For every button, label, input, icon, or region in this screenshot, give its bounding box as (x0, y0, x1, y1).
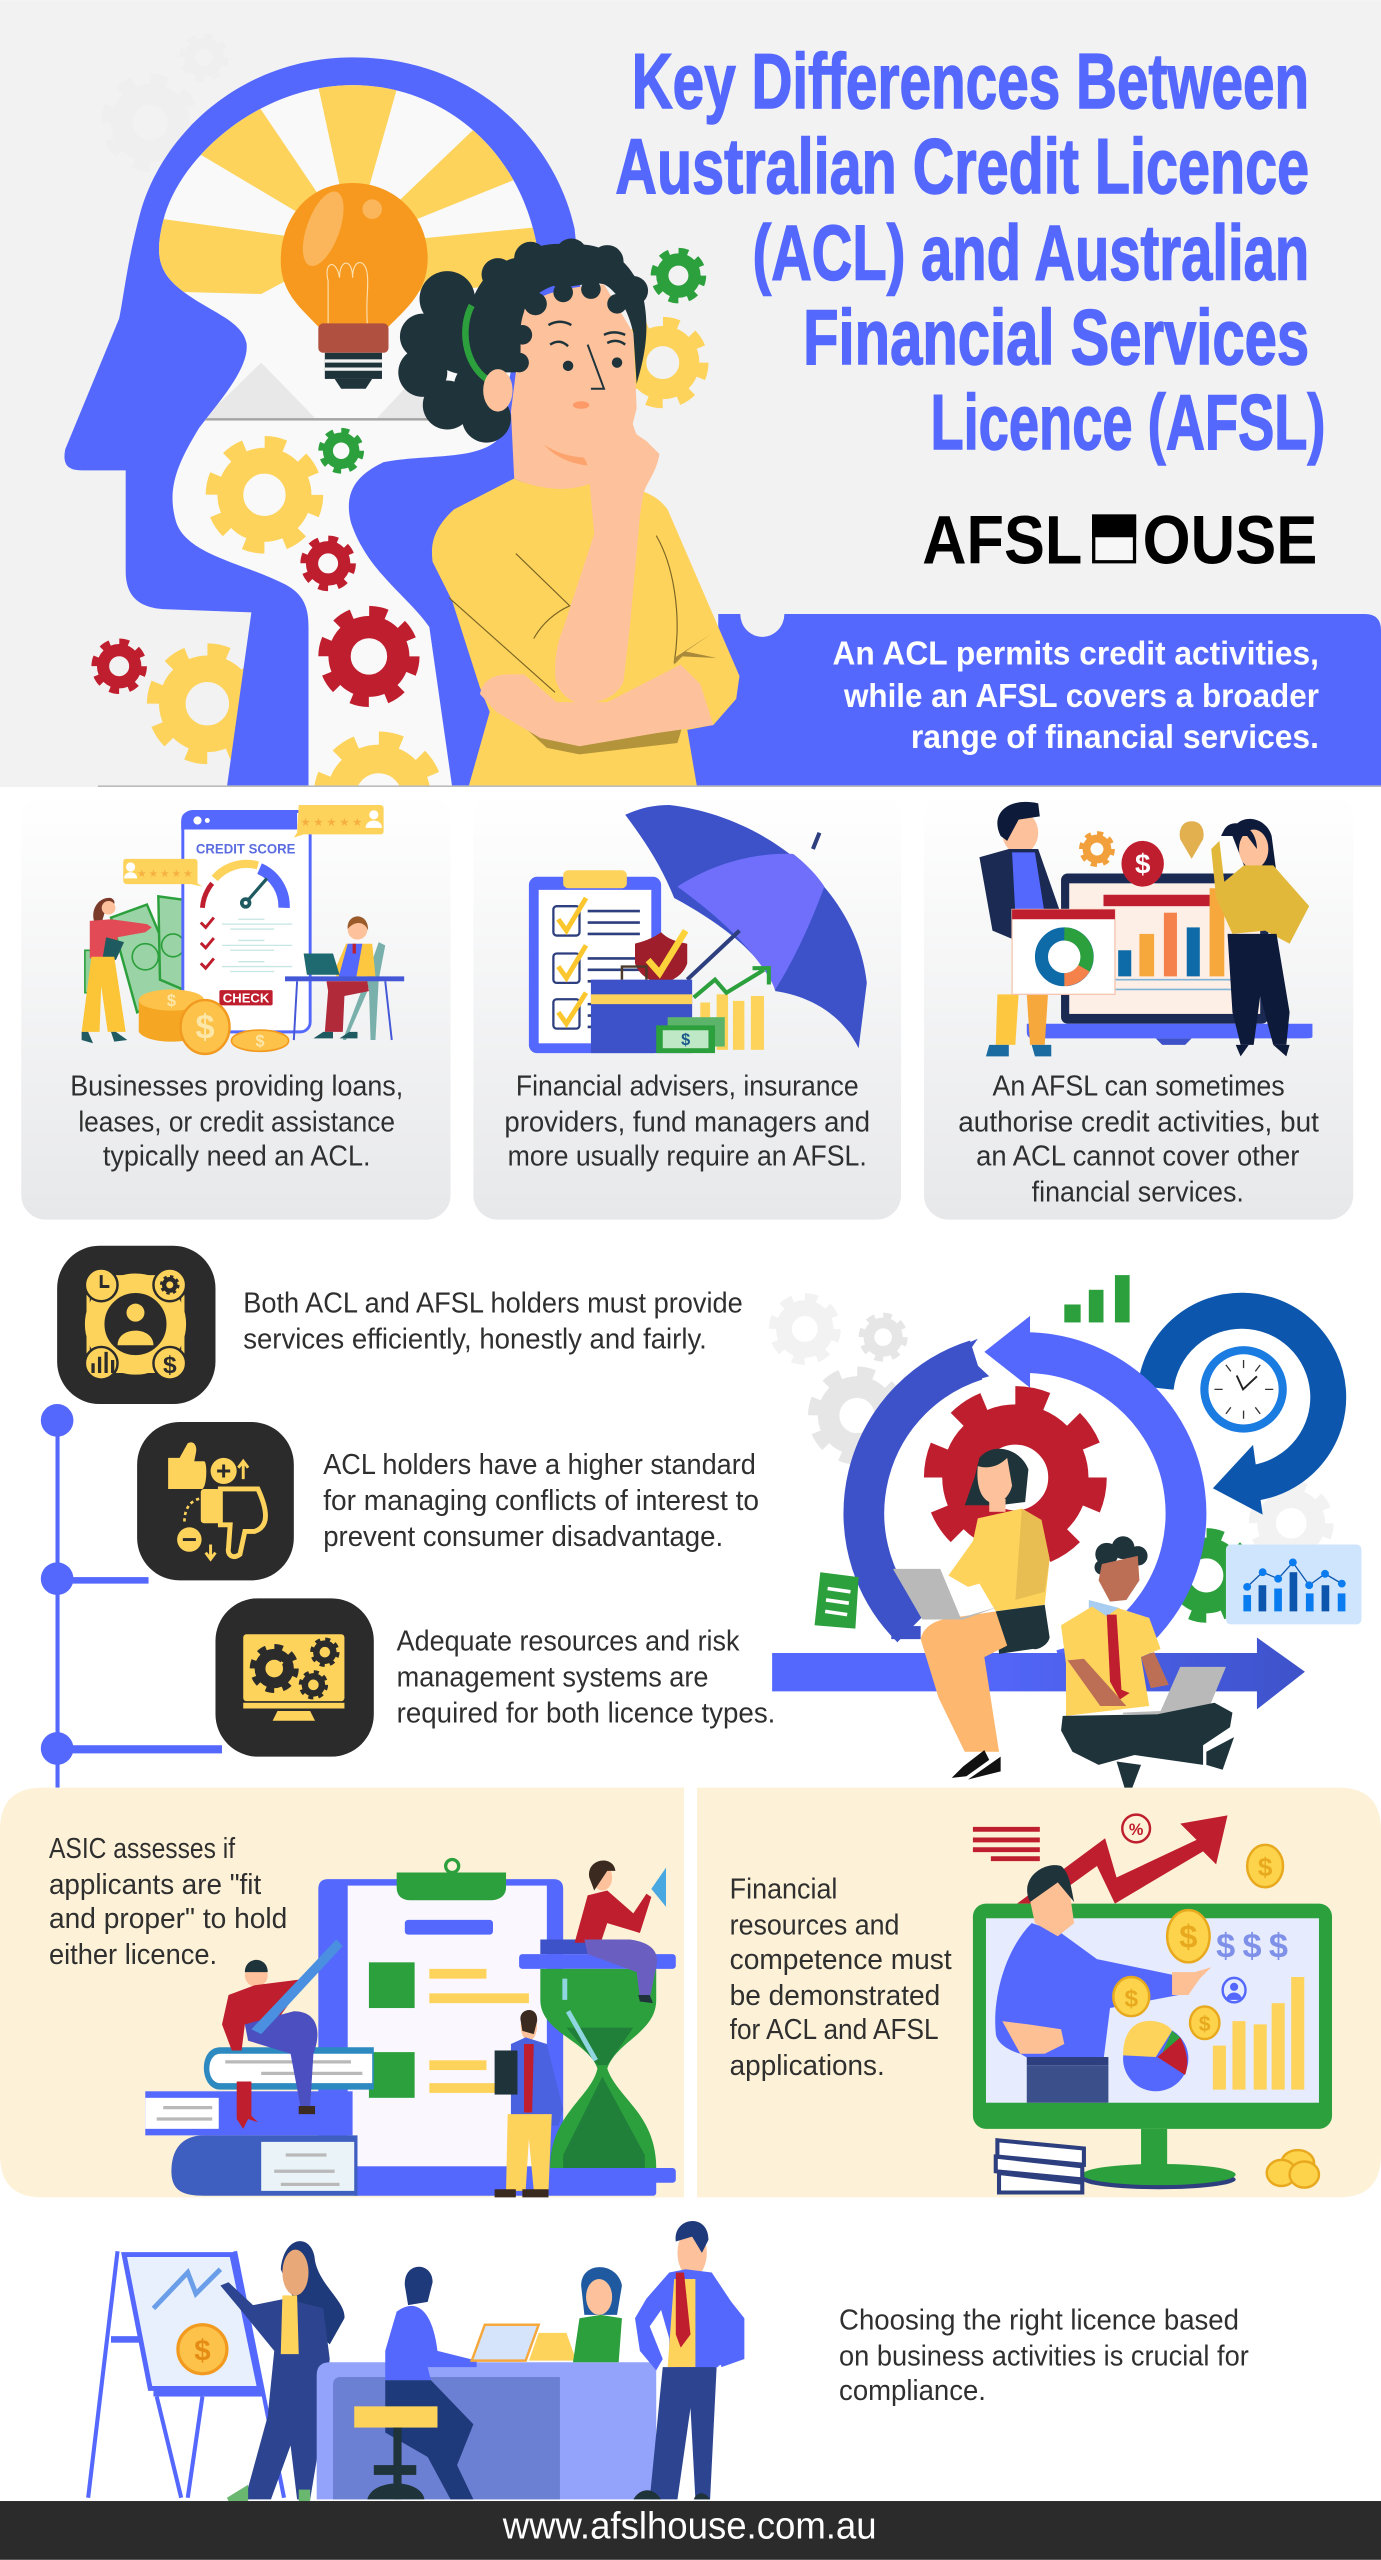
illustration: clipboard and hourglass (145, 1859, 676, 2197)
lower forearm (480, 665, 713, 746)
illustration: presenter on monitor (973, 1815, 1332, 2193)
flip chart (88, 2251, 284, 2498)
panel: hero (0, 0, 1381, 854)
closing text (839, 2305, 1249, 2407)
clipboard (318, 1859, 656, 2196)
panel: card overlap (924, 794, 1353, 1220)
panel text: and proper" to hold (49, 1903, 287, 1935)
card text: more usually require an AFSL. (508, 1141, 867, 1173)
checklist (201, 918, 292, 971)
item text (243, 1288, 743, 1356)
head silhouette (64, 57, 728, 787)
banknotes: $ (681, 1031, 690, 1049)
summary text: while an AFSL covers a broader (843, 678, 1319, 715)
item text: Adequate resources and risk (397, 1626, 740, 1658)
standing man (633, 2221, 744, 2499)
item text: services efficiently, honestly and fairly. (243, 1324, 707, 1356)
icon: red gear (936, 1398, 1095, 1557)
card text (958, 1071, 1319, 1209)
umbrella (625, 805, 867, 1048)
skin: face and neck (511, 284, 637, 490)
item text: Both ACL and AFSL holders must provide (243, 1288, 743, 1320)
woman with laptop (893, 1449, 1050, 1780)
closing text: compliance. (839, 2375, 986, 2407)
man (979, 802, 1069, 1056)
closing text: Choosing the right licence based (839, 2305, 1239, 2337)
icon: inner gears (206, 428, 439, 786)
rating bubble top (294, 805, 384, 838)
percent badge (1122, 1815, 1150, 1842)
item text: required for both licence types. (397, 1697, 775, 1729)
shirt (432, 478, 739, 787)
arm shadow (528, 730, 682, 754)
banner: summary (740, 591, 1319, 756)
summary text (833, 636, 1319, 756)
summary text: An ACL permits credit activities, (833, 636, 1319, 673)
panel text: ASIC assesses if (49, 1833, 236, 1865)
coin dollar marks: $ (1258, 1852, 1273, 1882)
card text (70, 1071, 403, 1173)
logo: AFSL House: AFSL (922, 501, 1082, 578)
gauge (202, 864, 284, 909)
illustration: presenters and dashboard (979, 802, 1312, 1056)
man with folder (495, 2010, 563, 2197)
person desk (285, 916, 404, 1040)
illustration: credit score phone: CREDIT SCORE (196, 840, 295, 856)
card text: leases, or credit assistance (78, 1106, 395, 1138)
hero illustration: thinking woman and head (64, 36, 1381, 854)
item text: for managing conflicts of interest to (323, 1485, 759, 1517)
banknotes (85, 896, 184, 1012)
clipboard (529, 870, 661, 1053)
item: resources and risk (215, 1598, 775, 1757)
panel text: applicants are "fit (49, 1869, 261, 1901)
presenter (995, 1865, 1211, 2103)
woman presenting (220, 2241, 345, 2501)
bar chart (1213, 1977, 1304, 2090)
light rays (159, 85, 536, 421)
stool (354, 2406, 437, 2499)
summary text: range of financial services. (911, 719, 1319, 756)
seated man (385, 2267, 477, 2499)
check badge: CHECK (223, 990, 270, 1005)
panel text: competence must (730, 1944, 952, 1976)
panel text: either licence. (49, 1939, 217, 1971)
item text: ACL holders have a higher standard (323, 1449, 756, 1481)
icon: location pin (1180, 821, 1204, 859)
card text: financial services. (1032, 1177, 1244, 1209)
logo: AFSL House: OUSE (1143, 501, 1317, 578)
icon: user (1223, 1978, 1246, 2002)
coins (139, 989, 289, 1054)
person left (82, 898, 152, 1043)
book stack (996, 2140, 1084, 2193)
document (815, 1572, 859, 1629)
illustration: consultation team (88, 2221, 744, 2501)
rating bubble left (123, 859, 202, 887)
headband (465, 305, 486, 379)
panel: card credit (21, 794, 451, 1220)
coins: $ (195, 1008, 215, 1046)
coin dollar marks (1124, 1852, 1273, 2036)
icon: monitor with gears (215, 1598, 374, 1757)
coin dollar marks: $ (1199, 2013, 1211, 2036)
illustration: team and process cycle (772, 1275, 1361, 1799)
icon: person with four badges: $ (163, 1352, 177, 1379)
panel: financial resources (697, 1788, 1381, 2197)
chart card (1226, 1544, 1361, 1624)
phone (183, 812, 310, 1032)
icon: person with four badges (57, 1246, 215, 1404)
coins: $ (167, 992, 176, 1010)
card text (504, 1071, 870, 1173)
pie chart (1123, 2021, 1188, 2091)
shield (635, 932, 687, 985)
head interior (159, 85, 537, 787)
rating bubble left: ★★★★★ (137, 868, 193, 880)
banknotes (656, 1017, 725, 1053)
illustration: credit score phone (82, 805, 404, 1054)
woman (1211, 819, 1309, 1056)
item text (397, 1626, 775, 1729)
panel text: resources and (730, 1910, 899, 1942)
icon: clock arrow (1156, 1311, 1328, 1515)
icon: thumbs up and down (137, 1422, 294, 1580)
heading (615, 37, 1325, 466)
item text (323, 1449, 759, 1553)
panel text (730, 1874, 952, 2082)
table (317, 2362, 656, 2499)
coin dollar marks: $ (1124, 1985, 1138, 2012)
card text: Financial advisers, insurance (516, 1071, 859, 1103)
monitor (973, 1904, 1332, 2189)
illustration: umbrella and clipboard (529, 805, 867, 1053)
card text: typically need an ACL. (103, 1141, 371, 1173)
red lines (973, 1829, 1040, 1859)
man with pencil (222, 1939, 343, 2114)
panel text: for ACL and AFSL (730, 2014, 939, 2046)
rating bubble top: ★★★★★ (300, 817, 362, 829)
man with laptop (1061, 1536, 1234, 1799)
panel text: applications. (730, 2050, 885, 2082)
flip chart: $ (194, 2335, 211, 2368)
dollar signs: $$$ (1216, 1927, 1288, 1965)
timeline connector (41, 1404, 222, 1788)
logo: AFSL House (922, 501, 1317, 578)
panel text (49, 1833, 287, 1971)
card text: An AFSL can sometimes (992, 1071, 1285, 1103)
panel text: be demonstrated (730, 1980, 940, 2012)
coins (1113, 1845, 1319, 2188)
books (145, 2047, 374, 2196)
card text: providers, fund managers and (504, 1106, 870, 1138)
growth chart (694, 968, 769, 1050)
card text: authorise credit activities, but (958, 1106, 1319, 1138)
woman (398, 239, 739, 787)
item: efficient services (57, 1246, 743, 1404)
chart panel (1012, 909, 1115, 994)
icon: dollar coin: $ (1135, 849, 1151, 880)
panel: ASIC fit and proper (0, 1788, 684, 2197)
footer (0, 2501, 1381, 2560)
coins: $ (256, 1033, 265, 1051)
item text: management systems are (397, 1661, 708, 1693)
woman with megaphone (575, 1860, 666, 2003)
panel: card advisers (473, 794, 901, 1220)
panel text: Financial (730, 1874, 837, 1906)
icon: dollar coin (1121, 841, 1164, 887)
closing text: on business activities is crucial for (839, 2341, 1249, 2373)
percent badge: % (1129, 1821, 1144, 1839)
card text: an ACL cannot cover other (976, 1141, 1300, 1173)
item: conflicts of interest (137, 1422, 759, 1580)
seated woman (573, 2267, 622, 2362)
ear (483, 369, 513, 412)
card text: Businesses providing loans, (70, 1071, 403, 1103)
hair top (470, 239, 648, 384)
cycle arrows (864, 1316, 1186, 1670)
raised arm and hand (555, 418, 659, 704)
hourglass (353, 1939, 676, 2183)
hair bun (398, 271, 511, 443)
coin dollar marks: $ (1179, 1918, 1197, 1955)
arrow: progress (772, 1637, 1305, 1709)
icon: light bulb (281, 183, 428, 389)
website url: www.afslhouse.com.au (502, 2505, 877, 2547)
growth arrow (1017, 1815, 1228, 1904)
laptops (472, 2325, 576, 2361)
item text: prevent consumer disadvantage. (323, 1521, 723, 1553)
banner base (718, 614, 1381, 787)
icon: outer gears (95, 251, 703, 756)
laptop dashboard (1027, 874, 1312, 1045)
icon: green bars (1064, 1275, 1130, 1322)
hero bottom rule (98, 785, 1381, 787)
briefcase (591, 931, 692, 1053)
